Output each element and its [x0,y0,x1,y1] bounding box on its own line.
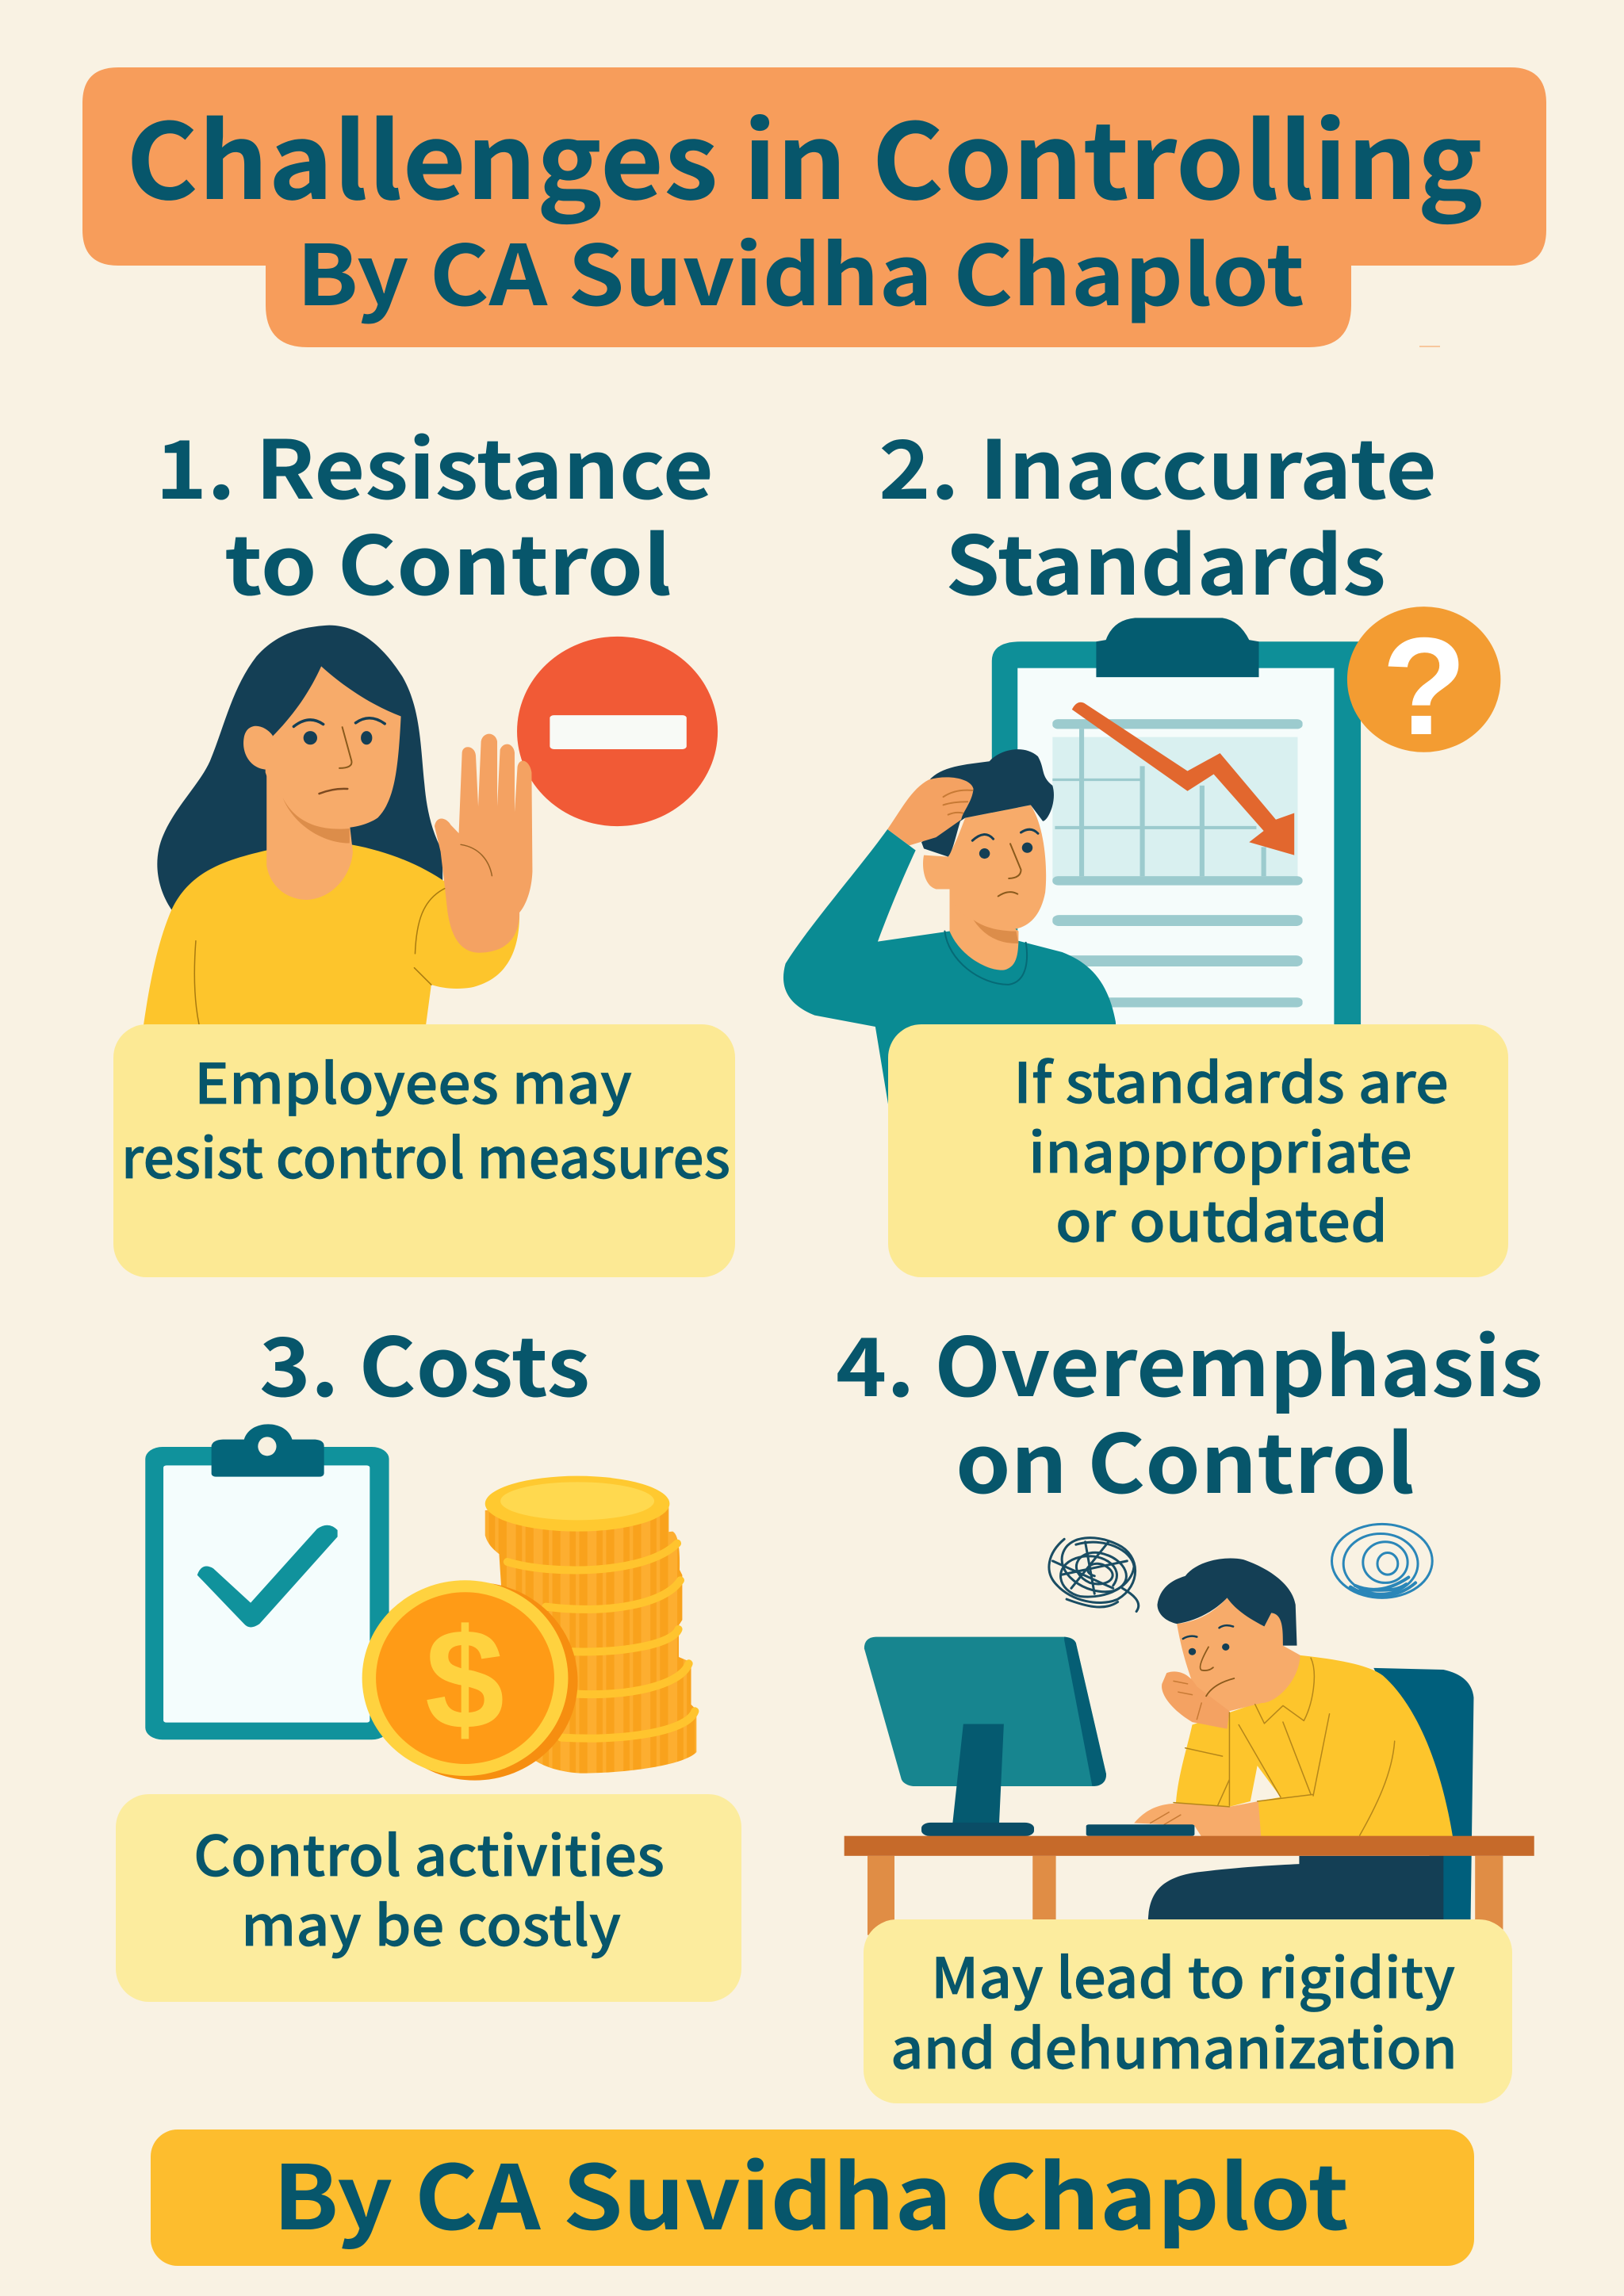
icon: blue scribble [1332,1524,1432,1598]
illustration: confused man with clipboard chart [783,607,1500,1106]
illustration: clipboard with check and coin stack [145,1424,696,1781]
heading 2 [879,406,1437,618]
trousers [1148,1856,1443,1924]
heading 4 [836,1303,1543,1517]
heading 1: 1. Resistance [155,406,714,522]
illustration: woman raising hand with stop sign [144,626,718,1027]
heading 4: 4. Overemphasis [836,1303,1543,1420]
caption box 2: If standards are [1013,1039,1449,1119]
heading 1: to Control [224,502,672,618]
icon: dark scribble [1049,1538,1139,1612]
caption box 1 [113,1024,735,1277]
illustration: stressed man at computer [845,1524,1534,1935]
hair [157,626,442,909]
caption box 4: May lead to rigidity [931,1934,1455,2015]
caption box 2: or outdated [1055,1178,1388,1258]
caption box 3: may be costly [241,1882,621,1962]
man [783,749,1120,1106]
title: Challenges in Controlling [126,78,1483,230]
icon: question badge circle [1347,607,1500,752]
footer banner [151,2127,1474,2266]
chair [1373,1668,1473,1932]
front coin [362,1580,578,1781]
neck [266,772,353,900]
clipboard [992,618,1361,1047]
heading 3: 3. Costs [259,1303,590,1420]
yellow sweater [144,844,519,1027]
caption box 2 [888,1024,1508,1277]
desk [845,1836,1534,1935]
caption box 3 [116,1794,741,2002]
caption box 1: Employees may [194,1040,632,1120]
raised hand [435,734,532,953]
icon: no entry sign [517,637,718,826]
footer banner: By CA Suvidha Chaplot [273,2127,1349,2256]
caption box 4 [864,1919,1512,2103]
icon: question mark: ? [1382,610,1466,764]
dollar sign: $ [425,1600,504,1759]
heading 1 [155,406,714,618]
clipboard with check mark [145,1424,389,1739]
banner shape [82,67,1546,347]
caption box 1: resist control measures [121,1115,730,1195]
face [243,666,401,844]
declining line chart [1052,702,1303,1007]
caption box 4: and dehumanization [891,2005,1457,2085]
computer monitor [864,1637,1106,1836]
header banner [82,67,1546,347]
subtitle: By CA Suvidha Chaplot [297,209,1304,330]
heading 2: Standards [945,502,1386,618]
caption box 2: inappropriate [1028,1109,1412,1189]
keyboard [1086,1824,1194,1836]
heading 4: on Control [956,1400,1415,1517]
caption box 3: Control activities [193,1812,665,1892]
coin stack [485,1476,696,1774]
heading 2: 2. Inaccurate [879,406,1437,522]
man [1134,1558,1453,1837]
